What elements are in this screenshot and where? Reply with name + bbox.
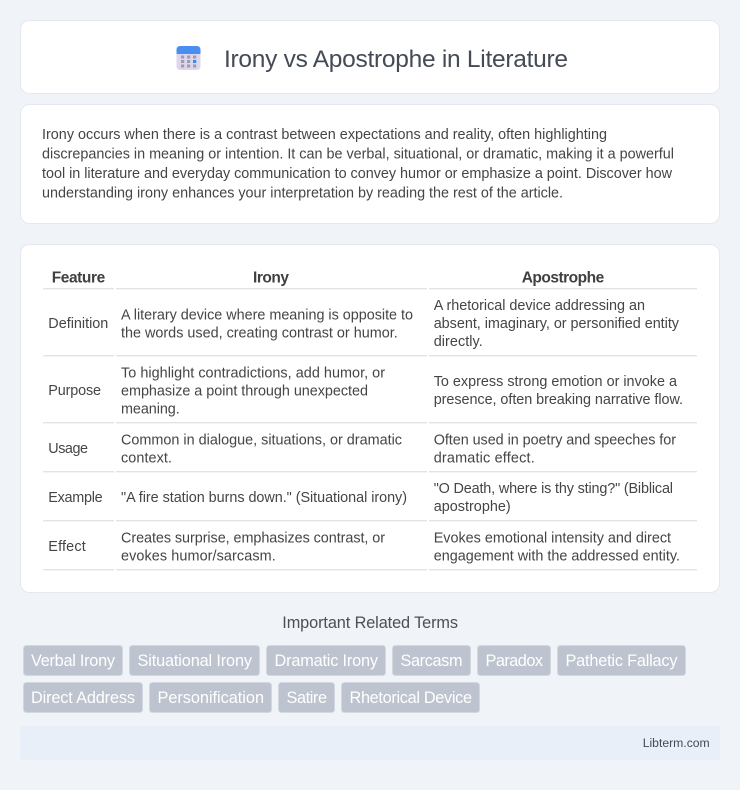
tag: rhetorical device: Rhetorical Device [350, 689, 472, 707]
table row: definition: Definition [48, 316, 108, 332]
tag: rhetorical device [342, 682, 480, 712]
tag: paradox [478, 646, 550, 676]
table row: purpose [43, 365, 697, 423]
footer credit: Libterm.com [643, 736, 710, 750]
table row: purpose: To express strong emotion or invoke a [434, 374, 677, 390]
text block: intro paragraph: tool in literature and everyday communication to convey humor or emphasize a point. Discover how [42, 166, 673, 182]
tag: sarcasm [392, 646, 470, 676]
tag: paradox: Paradox [486, 652, 543, 670]
table header row: Irony [253, 270, 289, 287]
table header row: Apostrophe [522, 270, 605, 287]
tag: pathetic fallacy: Pathetic Fallacy [566, 652, 678, 670]
table row: definition: the words used, creating contrast or humor. [121, 325, 398, 341]
table row: purpose: meaning. [121, 401, 180, 417]
table row: usage: Common in dialogue, situations, or dramatic [121, 432, 402, 448]
tag: pathetic fallacy [558, 646, 686, 676]
table row: definition [43, 298, 697, 356]
heading: important related terms: Important Related Terms [282, 614, 458, 632]
tag: situational irony: Situational Irony [138, 652, 253, 670]
table row: effect: Evokes emotional intensity and direct [434, 530, 671, 546]
tag: personification [150, 682, 272, 712]
table row: definition: A literary device where meaning is opposite to [121, 307, 413, 323]
table row: effect [43, 530, 697, 570]
panel: related term tags [24, 646, 686, 712]
tag: personification: Personification [158, 689, 264, 707]
table row: usage: Usage [48, 441, 88, 457]
table row: purpose: To highlight contradictions, add humor, or [121, 365, 385, 381]
panel: introduction [20, 104, 720, 224]
tag: satire: Satire [286, 689, 327, 707]
table row: purpose: emphasize a point through unexpected [121, 383, 368, 399]
table row: effect: Effect [48, 539, 86, 555]
text block: intro paragraph: understanding irony enhances your interpretation by reading the rest of the article. [42, 186, 563, 202]
tag: dramatic irony [266, 646, 386, 676]
table row: effect: evokes humor/sarcasm. [121, 548, 276, 564]
panel: title header [20, 20, 720, 94]
table row: example: Example [48, 490, 103, 506]
table row: effect: engagement with the addressed entity. [434, 548, 680, 564]
table row: example: "A fire station burns down." (Situational irony) [121, 490, 407, 506]
text block: intro paragraph: discrepancies in meaning or intention. It can be verbal, situational, or dramatic, making it a powerful [42, 147, 674, 163]
panel: footer [20, 726, 720, 760]
tag: direct address: Direct Address [31, 689, 135, 707]
table row: usage [43, 432, 697, 472]
tag: dramatic irony: Dramatic Irony [274, 652, 379, 670]
title: Irony vs Apostrophe in Literature [224, 46, 568, 73]
text block: intro paragraph [42, 127, 674, 202]
table row: definition: A rhetorical device addressing an [434, 298, 645, 314]
table row: effect: Creates surprise, emphasizes contrast, or [121, 530, 385, 546]
text block: intro paragraph: Irony occurs when there is a contrast between expectations and reality, often highlighting [42, 127, 607, 143]
table row: example [43, 481, 697, 521]
table header row: Feature [52, 270, 106, 287]
table row: usage: Often used in poetry and speeches for [434, 432, 676, 448]
icon: calendar [176, 46, 200, 70]
panel: comparison table [20, 244, 720, 592]
table row: definition: absent, imaginary, or personified entity [434, 316, 680, 332]
tag: verbal irony: Verbal Irony [31, 652, 116, 670]
table row: purpose: presence, often breaking narrative flow. [434, 392, 683, 408]
table row: example: "O Death, where is thy sting?" (Biblical [434, 481, 673, 497]
tag: situational irony [130, 646, 260, 676]
table header row [43, 270, 697, 289]
table row: usage: context. [121, 450, 172, 466]
tag: sarcasm: Sarcasm [400, 652, 462, 670]
tag: satire [278, 682, 334, 712]
table row: usage: dramatic effect. [434, 450, 535, 466]
tag: direct address [24, 682, 142, 712]
table row: example: apostrophe) [434, 499, 511, 515]
tag: verbal irony [24, 646, 122, 676]
table row: purpose: Purpose [48, 383, 101, 399]
table row: definition: directly. [434, 334, 483, 350]
